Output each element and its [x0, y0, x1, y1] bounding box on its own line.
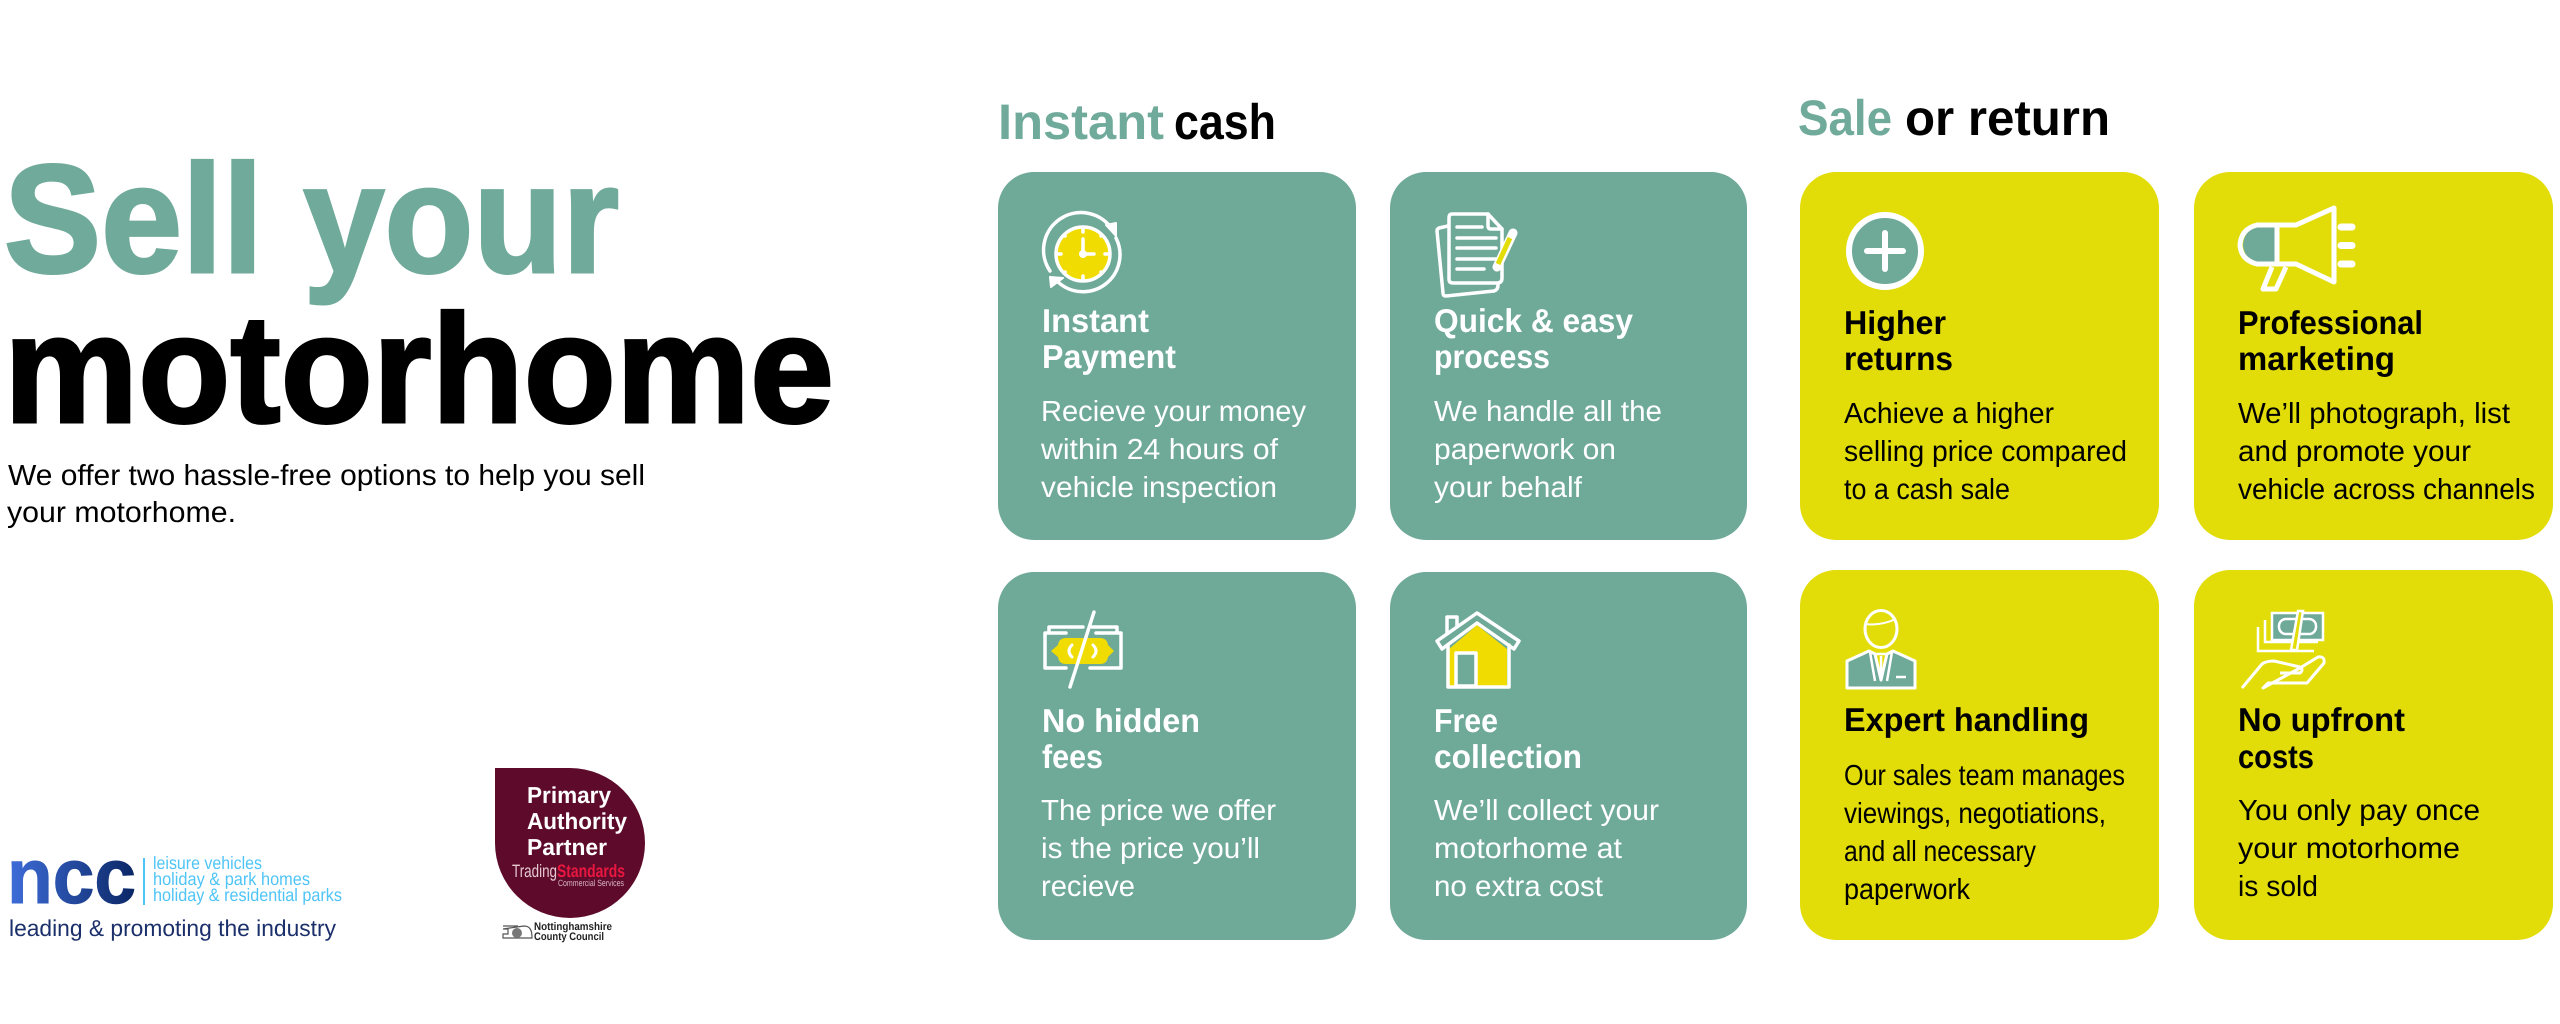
body text: vehicle across channels [2238, 474, 2535, 506]
body text: We’ll photograph, list [2238, 398, 2510, 430]
body text: is sold [2238, 871, 2318, 903]
body text [1041, 795, 1276, 903]
panel: Professional marketing [2194, 172, 2553, 540]
heading: fees [1042, 738, 1103, 775]
body text: your behalf [1434, 472, 1583, 504]
heading: process [1434, 338, 1550, 375]
logo: Primary Authority Partner badge: Commercial Services [558, 878, 624, 888]
body text: Recieve your money [1041, 396, 1306, 428]
heading [1042, 302, 1176, 375]
body text: The price we offer [1041, 795, 1276, 827]
panel: Instant Payment [998, 172, 1356, 540]
heading: Professional [2238, 304, 2423, 341]
logo: Primary Authority Partner badge: County Council [534, 931, 604, 943]
heading: Instant cash: cash [1174, 94, 1276, 150]
body text: vehicle inspection [1041, 472, 1277, 504]
body text [2238, 795, 2480, 903]
heading: Sale or return: Sale [1798, 90, 1892, 146]
body text: your motorhome [2238, 833, 2460, 865]
body text [2238, 398, 2535, 506]
body text [1434, 396, 1662, 504]
icon: clock with arrows [1044, 213, 1120, 292]
logo: Primary Authority Partner badge: Trading [512, 861, 557, 881]
heading: Higher [1844, 304, 1946, 341]
body text: to a cash sale [1844, 474, 2010, 506]
heading [1042, 702, 1200, 775]
body text: paperwork [1844, 874, 1970, 906]
logo: Primary Authority Partner badge: Nottinghamshire [534, 921, 612, 933]
body text: Our sales team manages [1844, 760, 2125, 792]
body text: Achieve a higher [1844, 398, 2054, 430]
title: Sell your motorhome: motorhome [4, 283, 834, 455]
heading: Instant [1042, 302, 1149, 339]
body text [1040, 396, 1306, 504]
body text: viewings, negotiations, [1844, 798, 2106, 830]
heading: Free [1434, 702, 1498, 739]
logo: NCC: ncc [7, 832, 136, 920]
icon: megaphone [2240, 208, 2352, 289]
body text: selling price compared [1844, 436, 2127, 468]
intro text [7, 460, 645, 529]
title: Sell your motorhome [4, 133, 834, 455]
title: Sell your motorhome: Sell your [4, 133, 619, 305]
heading: Sale or return [1798, 90, 2110, 146]
logo: NCC: leading & promoting the industry [9, 915, 336, 941]
heading: Payment [1042, 338, 1176, 375]
panel: Free collection [1390, 572, 1747, 940]
intro text: We offer two hassle-free options to help you sell [8, 460, 645, 492]
heading [2238, 701, 2405, 775]
body text: no extra cost [1434, 871, 1603, 903]
icon: banknote with slash [1045, 612, 1121, 687]
heading [1434, 302, 1634, 375]
heading [1434, 702, 1582, 775]
heading [1844, 304, 1953, 377]
body text: recieve [1041, 871, 1135, 903]
body text: and all necessary [1844, 836, 2036, 868]
panel: No hidden fees [998, 572, 1356, 940]
heading: No hidden [1042, 702, 1200, 739]
logo: NCC: holiday & residential parks [153, 885, 342, 905]
heading: costs [2238, 738, 2314, 775]
heading: Quick & easy [1434, 302, 1634, 339]
panel: Higher returns [1800, 172, 2159, 540]
body text: paperwork on [1434, 434, 1616, 466]
body text [1844, 398, 2127, 506]
heading: collection [1434, 738, 1582, 775]
icon: plus circle [1849, 215, 1921, 287]
heading: Sale or return: or return [1905, 90, 2110, 146]
logo: Primary Authority Partner badge: Authority [527, 808, 627, 834]
logo: Primary Authority Partner badge: Partner [527, 834, 607, 860]
panel: Quick & easy process [1390, 172, 1747, 540]
heading: Instant cash: Instant [998, 94, 1164, 150]
heading: marketing [2238, 340, 2395, 377]
icon: hand with money [2242, 611, 2324, 688]
body text: and promote your [2238, 436, 2471, 468]
body text: You only pay once [2238, 795, 2480, 827]
icon: house [1437, 613, 1519, 687]
logo: Primary Authority Partner badge: Primary [527, 782, 611, 808]
logo: NCC: leisure vehicles [153, 853, 262, 873]
body text: within 24 hours of [1040, 434, 1279, 466]
intro text: your motorhome. [7, 497, 236, 529]
logo: NCC [7, 832, 342, 941]
logo: NCC: holiday & park homes [153, 869, 310, 889]
icon: person in suit [1847, 610, 1915, 688]
body text [1434, 795, 1659, 903]
logo: Primary Authority Partner badge [495, 768, 645, 943]
body text: motorhome at [1434, 833, 1622, 865]
panel: No upfront costs [2194, 570, 2553, 940]
body text: is the price you’ll [1041, 833, 1260, 865]
panel: Expert handling [1800, 570, 2159, 940]
body text [1844, 760, 2125, 906]
icon: documents and pencil [1437, 214, 1513, 296]
logo: Primary Authority Partner badge: Standards [557, 861, 625, 881]
heading: Instant cash [998, 94, 1276, 150]
heading: No upfront [2238, 701, 2405, 738]
body text: We’ll collect your [1434, 795, 1659, 827]
heading: returns [1844, 340, 1953, 377]
heading [2238, 304, 2423, 377]
heading: Expert handling [1844, 701, 2089, 738]
body text: We handle all the [1434, 396, 1662, 428]
